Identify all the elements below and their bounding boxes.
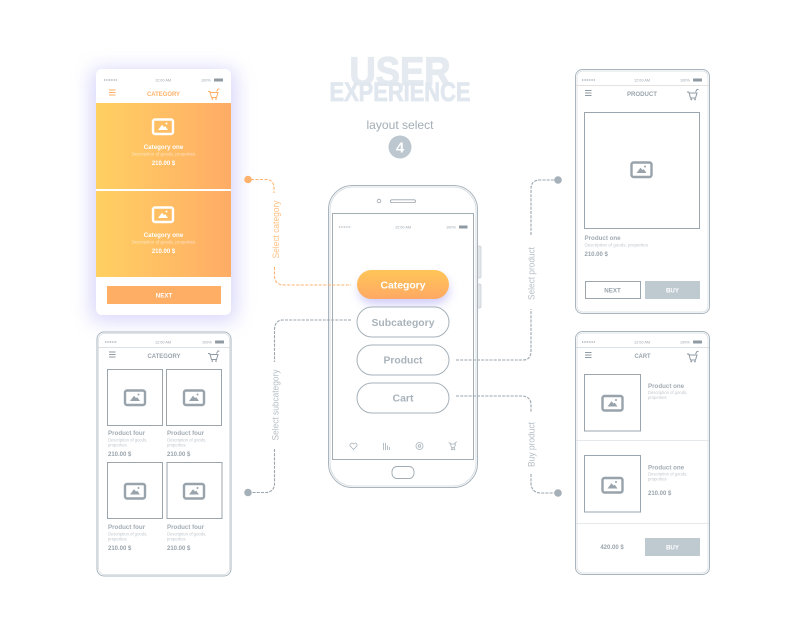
cart item 1: Description of goods, <box>648 390 687 395</box>
button: buy: BUY <box>666 544 680 552</box>
product details: Description of goods, properties <box>584 242 649 248</box>
product image <box>584 112 700 228</box>
status bar: 100% <box>680 78 690 82</box>
phone body <box>328 186 478 488</box>
status bar: 12:00 AM <box>155 78 171 82</box>
cart item 2: Product one <box>648 464 685 472</box>
product card 1: properties <box>108 442 127 448</box>
icon: menu <box>585 90 592 96</box>
product details <box>584 235 649 258</box>
label: select subcategory: Select subcategory <box>270 369 280 440</box>
label: buy product: Buy product <box>526 422 536 467</box>
button: buy: BUY <box>666 288 680 294</box>
icon: cart <box>208 89 220 100</box>
button: next <box>586 282 640 298</box>
icon: menu <box>585 352 592 358</box>
heading: cart: CART <box>634 353 651 360</box>
product card 3 <box>108 462 162 552</box>
pill button: subcategory: Subcategory <box>372 317 435 329</box>
status bar: 12:00 AM <box>634 340 650 344</box>
status bar <box>105 340 224 344</box>
screen <box>332 214 474 460</box>
button: next: NEXT <box>604 288 621 294</box>
status bar: 100% <box>201 78 211 82</box>
panel: subcategory screen <box>97 332 231 576</box>
card: category one bottom: Category one <box>144 232 184 239</box>
icon: cart <box>687 352 698 362</box>
button: next: NEXT <box>156 292 172 300</box>
heading: category: CATEGORY <box>147 91 181 98</box>
card: category one top <box>96 103 231 189</box>
product card 3: 210.00 $ <box>108 546 132 552</box>
panel: cart screen <box>576 332 710 574</box>
status bar: 100% <box>446 226 456 230</box>
product card 1: Product four <box>108 430 146 437</box>
status bar: 12:00 AM <box>155 340 171 344</box>
product details: Product one <box>584 235 621 242</box>
status bar: 12:00 AM <box>634 78 650 82</box>
title: EXPERIENCE <box>330 77 470 107</box>
product card 4 <box>167 462 222 552</box>
step number badge <box>388 136 412 158</box>
cart item 1 <box>584 374 687 431</box>
subtitle: layout select: layout select <box>366 118 434 132</box>
product card 2: Description of goods, <box>167 438 206 442</box>
product card 2 <box>166 370 222 458</box>
product card 2: Product four <box>167 430 205 437</box>
status bar <box>104 78 223 82</box>
panel: central phone <box>328 186 481 488</box>
icon: menu <box>109 90 116 95</box>
product card 4: Description of goods, <box>167 532 206 536</box>
status bar: 100% <box>680 340 690 344</box>
pill button: category <box>357 270 449 304</box>
panel: product screen <box>576 70 710 314</box>
icon: menu <box>109 352 116 357</box>
status bar: 100% <box>202 340 212 344</box>
pill button: subcategory <box>357 307 449 337</box>
label: select category: Select category <box>271 200 281 258</box>
button: buy <box>645 281 700 299</box>
product card 1: 210.00 $ <box>108 452 132 458</box>
card: category one top: 210.00 $ <box>152 161 176 167</box>
step number badge: 4 <box>396 140 405 156</box>
home button <box>392 466 414 478</box>
cart item 1: properties <box>648 395 667 400</box>
cart item 2 <box>584 456 687 512</box>
pill button: cart <box>357 383 449 413</box>
card: category one bottom: 210.00 $ <box>152 249 176 255</box>
product card 1: Description of goods, <box>108 438 147 442</box>
card: category one bottom <box>96 191 231 277</box>
side buttons <box>477 246 481 308</box>
panel: category screen (selected) <box>90 68 237 322</box>
label: select product: Select product <box>526 247 536 300</box>
connector: select subcategory <box>244 320 351 496</box>
product card 3: properties <box>108 536 127 542</box>
button: next <box>107 286 221 304</box>
pill button: product <box>357 345 449 375</box>
tab bar icons <box>350 442 457 450</box>
card: category one top: Description of goods, properties <box>132 152 196 156</box>
cart item 2: Description of goods, <box>648 472 687 476</box>
title: USER <box>350 50 451 94</box>
connector: select product <box>456 176 562 360</box>
icon: cart <box>687 90 698 100</box>
status bar <box>582 340 702 344</box>
cart item 1: Product one <box>648 383 685 390</box>
status bar <box>582 78 702 82</box>
product details: 210.00 $ <box>584 252 609 258</box>
product card 3: Product four <box>108 524 146 531</box>
product card 2: properties <box>167 442 186 448</box>
cart item 2: properties <box>648 476 667 482</box>
product card 4: 210.00 $ <box>167 546 191 552</box>
title <box>330 50 470 107</box>
heading: product: PRODUCT <box>627 91 657 98</box>
heading: category: CATEGORY <box>148 353 181 360</box>
status bar <box>339 226 468 230</box>
button: buy <box>645 538 700 556</box>
cart item 2: 210.00 $ <box>648 491 672 497</box>
cart total: 420.00 $ <box>600 545 624 551</box>
product card 2: 210.00 $ <box>167 452 191 458</box>
camera and speaker <box>377 199 416 203</box>
card: category one top: Category one <box>144 144 184 151</box>
status bar: 12:00 AM <box>395 226 411 230</box>
pill button: cart: Cart <box>392 392 414 404</box>
product card 3: Description of goods, <box>108 532 147 536</box>
pill button: category: Category <box>380 280 426 292</box>
card: category one bottom: Description of goods, properties <box>132 240 196 244</box>
product card 4: Product four <box>167 524 205 531</box>
connector: select category <box>244 176 351 285</box>
pill button: product: Product <box>384 354 423 366</box>
product card 1 <box>108 370 162 458</box>
icon: cart <box>208 351 220 362</box>
product card 4: properties <box>167 536 186 542</box>
connector: buy product <box>456 396 562 497</box>
